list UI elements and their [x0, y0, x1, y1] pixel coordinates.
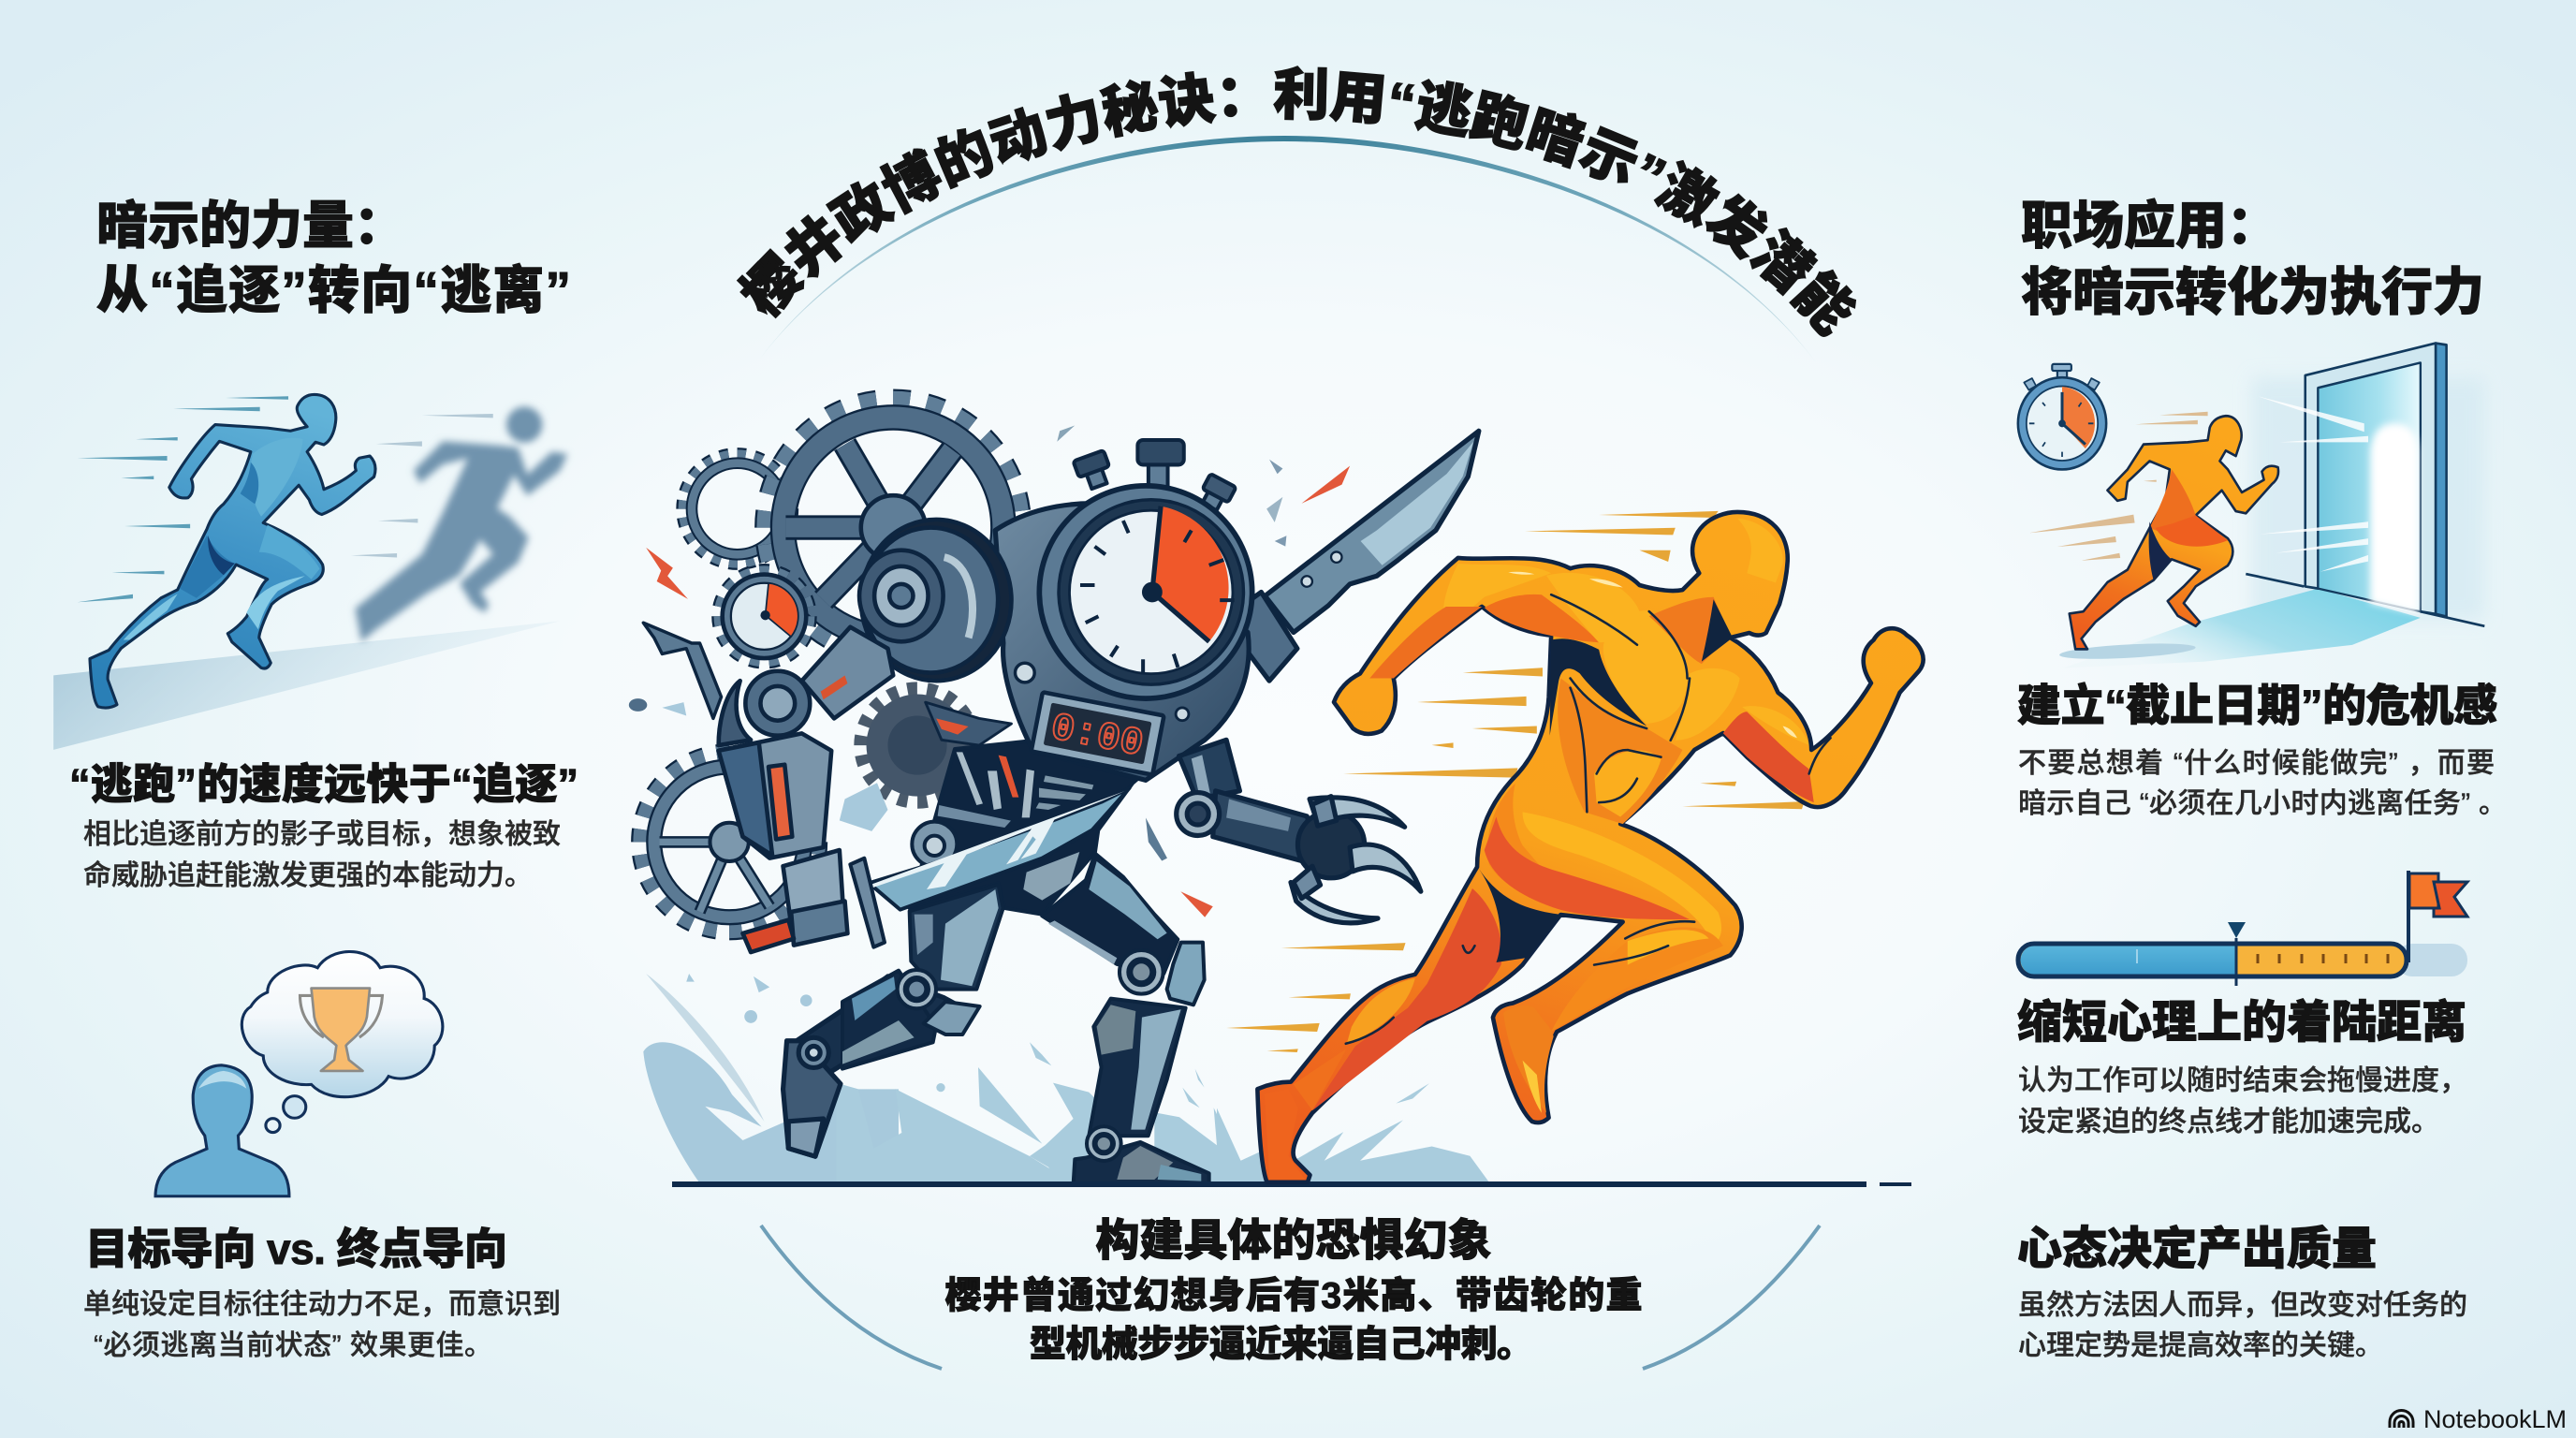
text: mindset body: 心理定势是提高效率的关键。 — [2018, 1330, 2383, 1361]
text: escape speed body: 相比追逐前方的影子或目标，想象被致 — [83, 819, 561, 850]
left arm — [719, 627, 893, 952]
title arc line — [760, 136, 1816, 362]
speed lines — [78, 396, 288, 602]
runner body — [90, 394, 375, 708]
body silhouette — [1257, 512, 1924, 1182]
sparks and debris — [629, 426, 1350, 917]
panel: right column heading: 将暗示转化为执行力 — [2021, 263, 2484, 321]
ground line — [672, 1181, 1911, 1187]
text: mindset body: 虽然方法因人而异，但改变对任务的 — [2018, 1290, 2467, 1321]
subheading: landing distance: 缩短心理上的着陆距离 — [2017, 998, 2466, 1048]
text: goal vs end body — [83, 1289, 561, 1361]
front sword — [850, 788, 1130, 947]
panel: left column heading: 暗示的力量： — [96, 197, 405, 255]
icon: door escape scene — [2018, 344, 2484, 668]
lens cylinder — [859, 520, 1011, 681]
logo: NotebookLM: NotebookLM — [2423, 1405, 2567, 1433]
main body — [995, 504, 1249, 780]
right foot — [1074, 1142, 1209, 1184]
ground wedge — [53, 621, 560, 750]
door glow backdrop — [2252, 377, 2484, 620]
text: landing distance body: 认为工作可以随时结束会拖慢进度， — [2018, 1065, 2467, 1096]
speed lines — [1226, 511, 1805, 1052]
small orange runner — [2070, 416, 2278, 649]
left shin in robot coordinates — [783, 976, 973, 1156]
subheading: mindset: 心态决定产出质量 — [2017, 1225, 2377, 1274]
icon: blue runner with shadow chaser — [53, 394, 567, 750]
person silhouette — [155, 1065, 289, 1196]
subheading: deadline crisis: 建立“截止日期”的危机感 — [2017, 681, 2497, 730]
text: mindset body — [2018, 1290, 2467, 1361]
text: goal vs end body: 单纯设定目标往往动力不足，而意识到 — [83, 1289, 561, 1320]
title: 樱井政博的动力秘诀：利用“逃跑暗示”激发潜能 — [736, 66, 1857, 337]
light rays — [2258, 396, 2368, 572]
digital display — [1032, 692, 1164, 775]
right arm with claw — [1177, 740, 1421, 923]
center illustration: ground splash — [643, 974, 1489, 1186]
legs, pelvis and ribs — [842, 740, 1209, 1184]
blurred shadow figure — [355, 406, 567, 642]
icon: thought bubble with trophy — [155, 951, 443, 1196]
panel: right column heading: 职场应用： — [2021, 197, 2278, 255]
center text block: 樱井曾通过幻想身后有3米高、带齿轮的重 — [945, 1276, 1642, 1316]
bottom arc right — [1643, 1225, 1820, 1369]
speed lines — [2029, 412, 2208, 561]
left thigh — [910, 885, 1003, 990]
text: landing distance body — [2018, 1065, 2467, 1137]
text: goal vs end body: “必须逃离当前状态” 效果更佳。 — [94, 1330, 492, 1361]
center text block — [945, 1215, 1642, 1365]
trophy — [312, 989, 370, 1071]
bottom arc left — [761, 1225, 942, 1369]
back layers: sword and gears — [640, 399, 1479, 931]
upper body — [629, 426, 1421, 952]
main stopwatch — [1149, 461, 1168, 488]
muscle shading — [1265, 519, 1831, 1180]
right shin — [1089, 999, 1186, 1136]
center text block: 型机械步步逼近来逼自己冲刺。 — [1030, 1325, 1533, 1365]
panel: right column heading — [2021, 197, 2484, 321]
subheading: goal vs end: 目标导向 vs. 终点导向 — [85, 1225, 507, 1273]
text: deadline crisis body: 不要总想着 “什么时候能做完” ，而要 — [2018, 748, 2495, 779]
text: escape speed body: 命威胁追赶能激发更强的本能动力。 — [83, 860, 533, 891]
text: landing distance body: 设定紧迫的终点线才能加速完成。 — [2018, 1107, 2439, 1137]
broken spike — [643, 623, 722, 718]
digital display: 0:00 — [1047, 707, 1147, 767]
icon: orange running hero — [1226, 511, 1924, 1182]
floor light — [2063, 589, 2421, 668]
door frame — [2436, 344, 2447, 617]
text: deadline crisis body — [2018, 748, 2507, 819]
right thigh — [1042, 854, 1178, 974]
icon: robot chaser — [629, 399, 1479, 1184]
center text block: 构建具体的恐惧幻象 — [1095, 1215, 1492, 1265]
panel: left column heading: 从“追逐”转向“逃离” — [96, 261, 571, 319]
stopwatch — [2018, 364, 2106, 469]
chart: progress bar with flag — [2018, 871, 2467, 986]
text: deadline crisis body: 暗示自己 “必须在几小时内逃离任务” 。 — [2018, 788, 2507, 819]
subheading: escape speed: “逃跑”的速度远快于“追逐” — [69, 760, 578, 808]
muscle lines — [1346, 594, 1831, 1044]
panel: left column heading — [96, 197, 571, 319]
text: escape speed body — [83, 819, 561, 891]
left shin upper — [842, 971, 936, 1069]
